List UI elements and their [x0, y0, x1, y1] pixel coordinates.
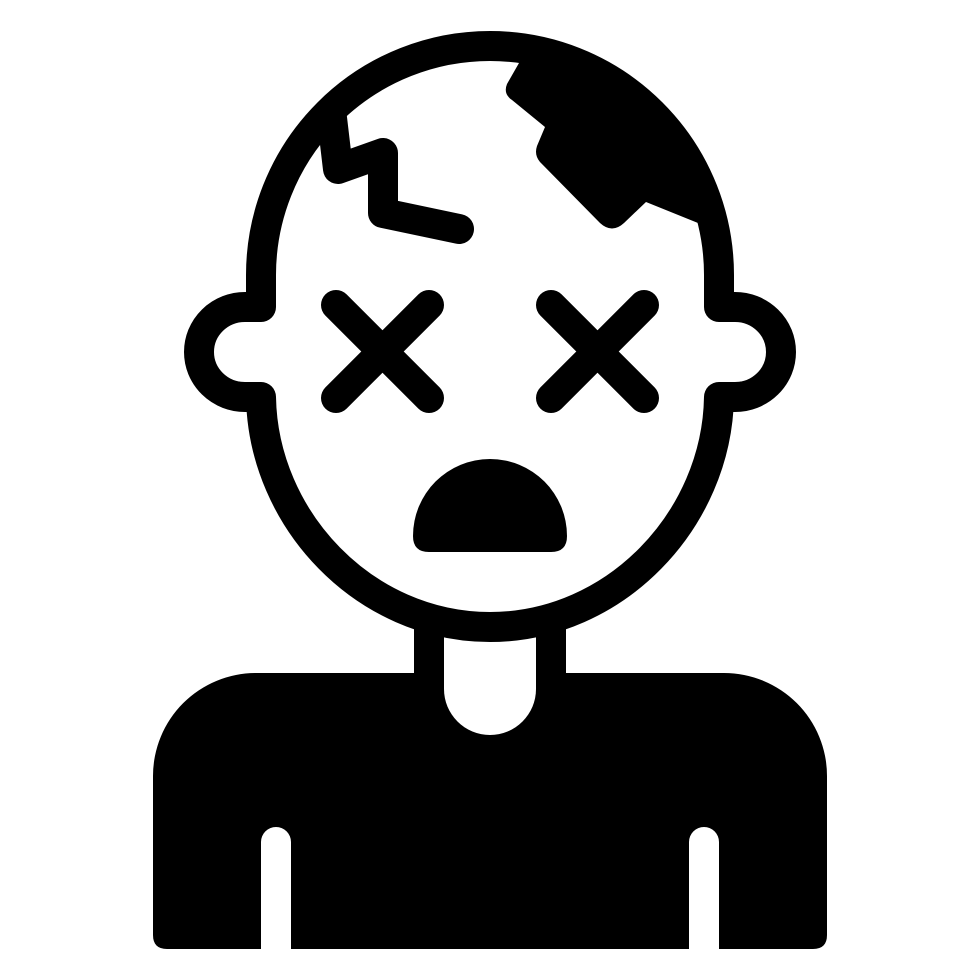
forehead crack [332, 118, 459, 229]
open mouth [413, 459, 567, 552]
hair patch [506, 48, 713, 228]
head outline with ears [199, 46, 781, 627]
body torso with neck [153, 625, 827, 949]
right x eye [551, 305, 644, 398]
left x eye [336, 305, 429, 398]
